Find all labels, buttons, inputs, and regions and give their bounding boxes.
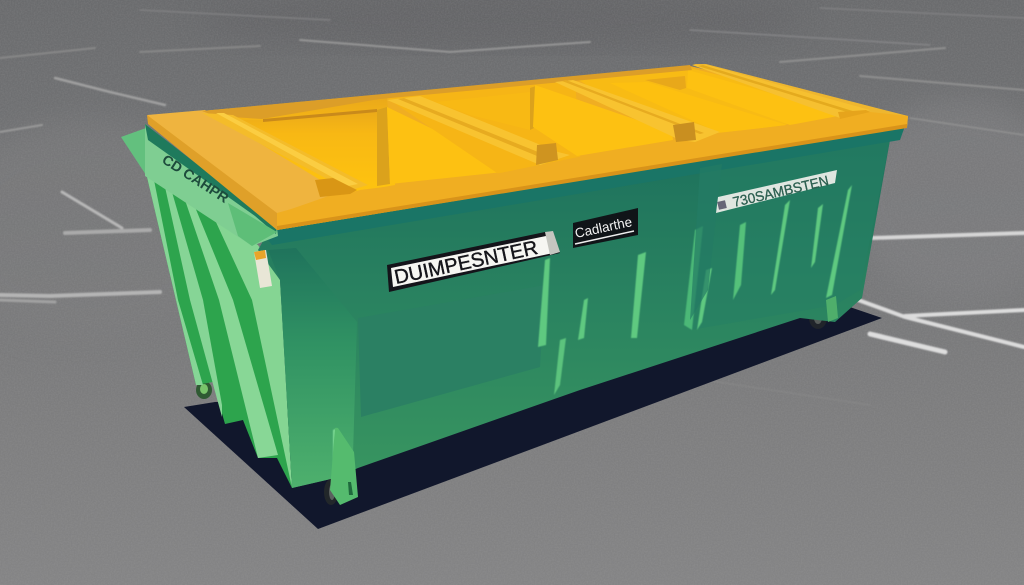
top rim of front face bbox=[262, 126, 905, 245]
right label: TSOSAMBSTEN: 730SAMBSTEN bbox=[731, 172, 830, 210]
bay 2 interior bbox=[387, 78, 673, 175]
right side panel highlight bbox=[690, 140, 890, 330]
lid left flat panel bbox=[147, 110, 340, 214]
small label: Cadlarthe bbox=[573, 208, 638, 248]
dumpster left side with ribs bbox=[147, 177, 292, 488]
lid front rim bbox=[147, 64, 908, 230]
lid cross rails bbox=[202, 65, 870, 197]
near leg and wheel bbox=[324, 428, 358, 505]
vertical ribs and streaks bbox=[333, 185, 852, 480]
warning sticker bbox=[254, 250, 272, 288]
shadow under dumpster bbox=[184, 303, 882, 529]
left side label: CD CAHPR bbox=[159, 151, 232, 206]
recessed door panel bbox=[358, 285, 545, 417]
lid back rim bbox=[202, 65, 692, 119]
main label: DUMPESNTER: DUIMPESNTER bbox=[392, 237, 540, 289]
rounded corner shading bbox=[268, 248, 357, 488]
dumpster front face bbox=[258, 126, 905, 488]
vertical post bbox=[690, 164, 722, 320]
bay 1 interior bbox=[202, 98, 503, 195]
small label: Cadlarthe: Cadlarthe bbox=[574, 214, 633, 241]
bay 3 and 4 interior bbox=[575, 68, 870, 140]
lid base bbox=[147, 66, 908, 230]
right leg bbox=[826, 296, 838, 322]
far wheels bbox=[196, 307, 827, 399]
left green flap bbox=[121, 124, 278, 246]
painted ground lines bbox=[0, 8, 1024, 405]
